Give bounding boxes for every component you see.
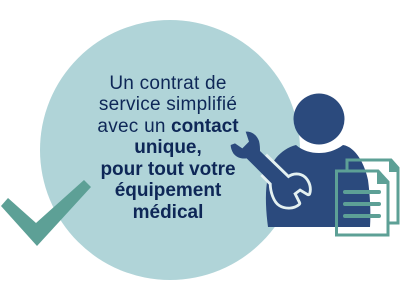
text block: service message: équipement xyxy=(115,180,221,201)
text block: service message: médical xyxy=(133,202,203,223)
front document xyxy=(336,171,388,235)
icon: documents xyxy=(336,159,399,235)
icon: technician xyxy=(266,94,370,227)
text block: service message: Un contrat de xyxy=(109,72,227,94)
wrench shape xyxy=(231,132,309,207)
text block: service message: avec un contact xyxy=(97,116,239,137)
icon: wrench xyxy=(231,132,309,207)
icon: check mark xyxy=(1,180,91,246)
document text lines xyxy=(345,192,379,216)
wrench outline xyxy=(262,156,309,207)
text block: service message: unique, xyxy=(134,137,202,158)
back document xyxy=(347,160,398,223)
text block: service message: pour tout votre xyxy=(100,159,236,180)
text block: service message: service simplifié xyxy=(99,94,237,115)
person body xyxy=(266,145,370,227)
person head xyxy=(294,94,344,144)
background circle xyxy=(40,20,300,280)
text block: service message xyxy=(97,72,239,223)
